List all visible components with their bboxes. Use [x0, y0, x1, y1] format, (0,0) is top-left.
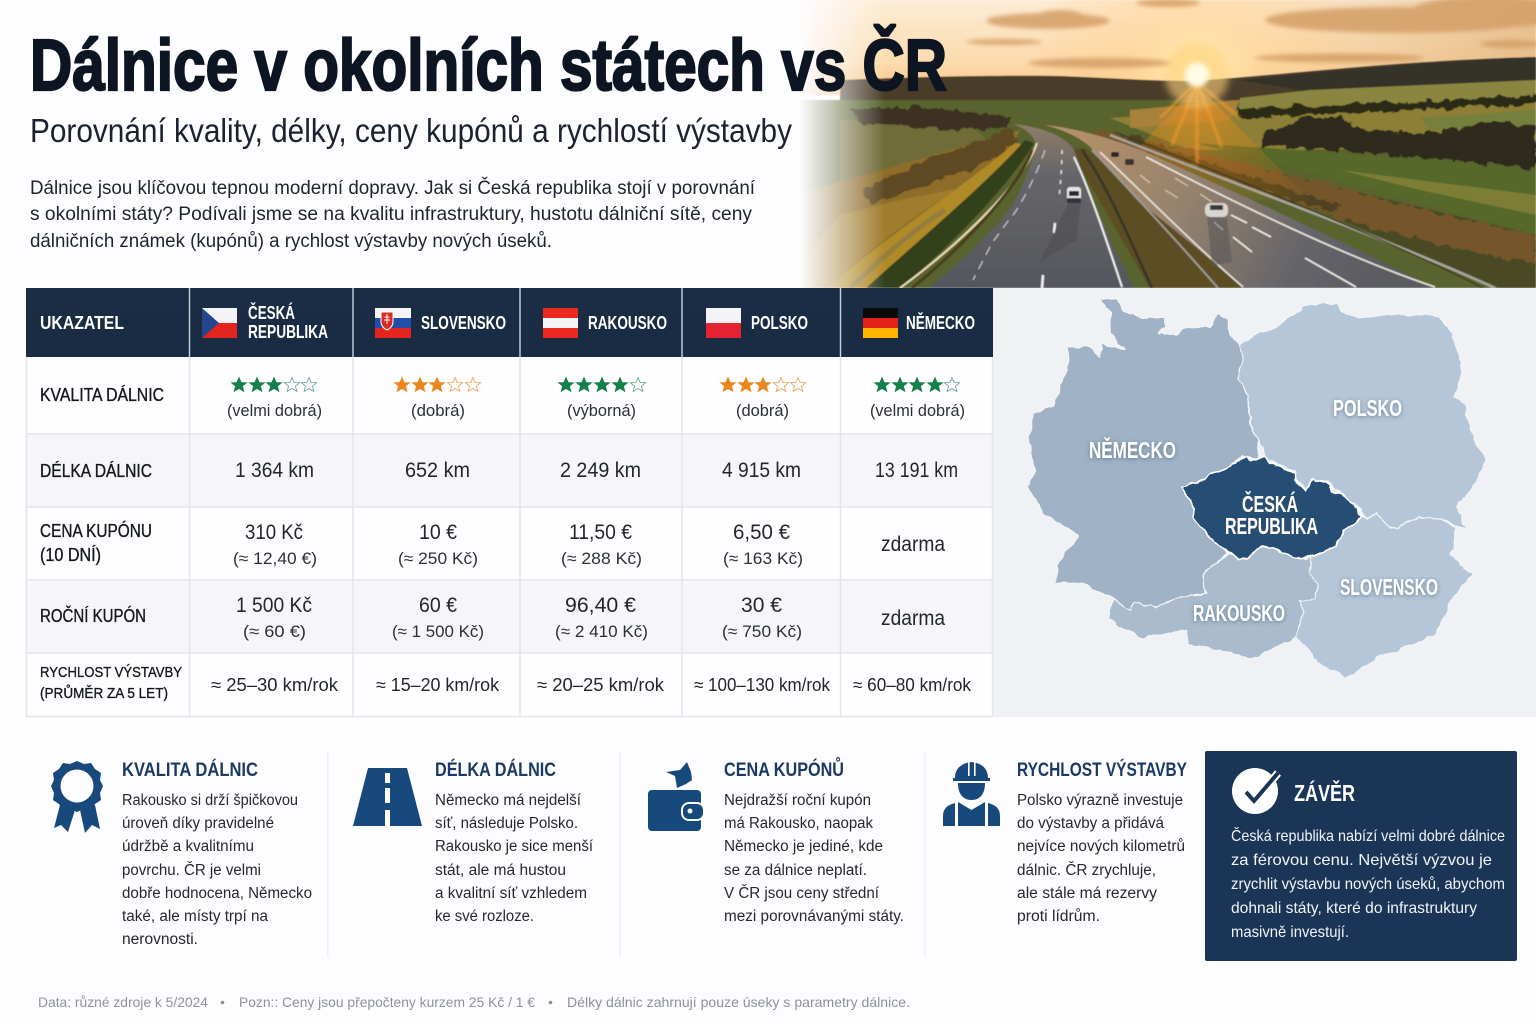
stars: Německo	[873, 376, 960, 392]
row: délka dálnic: 4 915 km	[722, 459, 801, 482]
map: Česká republika	[1183, 455, 1362, 560]
row: roční kupón: (≈ 750 Kč)	[722, 622, 802, 641]
footer note	[38, 994, 910, 1010]
panel: map	[993, 288, 1536, 717]
text block: dálnic. ČR zrychluje,	[1017, 862, 1156, 879]
footer note: Data: různé zdroje k 5/2024	[38, 994, 208, 1010]
table body background	[26, 357, 993, 717]
map: Slovensko	[1295, 513, 1473, 678]
cars	[1040, 152, 1232, 266]
row: cena kupónu: 6,50 €	[733, 521, 790, 544]
flag: Německo	[863, 308, 898, 338]
distant hills	[839, 56, 1532, 101]
title: Dálnice v okolních státech vs ČR	[30, 25, 947, 106]
row: kvalita dálnic: (velmi dobrá)	[870, 401, 965, 420]
text block: za férovou cenu. Největší výzvou je	[1231, 852, 1492, 869]
text block: V ČR jsou ceny střední	[724, 885, 880, 902]
intro paragraph	[30, 177, 756, 252]
text block: mezi porovnávanými státy.	[724, 908, 904, 925]
fields	[780, 100, 1536, 288]
text block: Nejdražší roční kupón	[724, 792, 871, 809]
text block	[724, 792, 904, 925]
subtitle: Porovnání kvality, délky, ceny kupónů a rychlostí výstavby	[30, 112, 792, 149]
map: Polsko	[1238, 303, 1487, 528]
hero photo: motorway at sunset	[780, 0, 1536, 288]
row: délka dálnic	[40, 459, 958, 482]
row: roční kupón: 1 500 Kč	[236, 594, 312, 617]
panel: kvalita dálnic: KVALITA DÁLNIC	[122, 759, 258, 781]
row: rychlost výstavby	[40, 664, 972, 702]
table header row: NĚMECKO	[906, 312, 975, 333]
map label: Česká republika: ČESKÁ	[1242, 490, 1298, 517]
row: cena kupónu: 10 €	[419, 521, 457, 544]
text block: zrychlit výstavbu nových úseků, abychom	[1231, 875, 1505, 893]
flag: Polsko	[706, 308, 741, 338]
row: kvalita dálnic: (dobrá)	[736, 401, 789, 420]
row: cena kupónu: zdarma	[881, 533, 945, 556]
text block: údržbě a kvalitnímu	[122, 838, 254, 855]
row: cena kupónu: CENA KUPÓNU	[40, 520, 152, 541]
panel: délka dálnic: DÉLKA DÁLNIC	[435, 759, 556, 781]
stars: Rakousko	[557, 376, 646, 392]
panel: závěr: ZÁVĚR	[1294, 779, 1355, 806]
text block	[1231, 826, 1505, 941]
text block: ale stále má rezervy	[1017, 885, 1157, 902]
icon: award rosette	[51, 761, 103, 833]
icon: construction worker	[943, 762, 1000, 826]
text block: Rakousko si drží špičkovou	[122, 792, 298, 809]
row: rychlost výstavby: (PRŮMĚR ZA 5 LET)	[40, 684, 168, 702]
text block: dobře hodnocena, Německo	[122, 885, 312, 902]
panel: cena kupónů	[648, 758, 904, 925]
row: délka dálnic: 2 249 km	[560, 459, 641, 482]
stars: Polsko	[719, 376, 806, 392]
flag: Česká republika	[202, 308, 237, 338]
sun rays	[1138, 88, 1301, 200]
row: rychlost výstavby: ≈ 100–130 km/rok	[694, 675, 831, 695]
map label: Německo: NĚMECKO	[1089, 436, 1176, 463]
text block: povrchu. ČR je velmi	[122, 862, 261, 879]
row: roční kupón: (≈ 1 500 Kč)	[392, 622, 484, 641]
text block	[1017, 792, 1185, 925]
table header row	[26, 288, 993, 357]
panel: kvalita dálnic	[51, 759, 312, 948]
row: kvalita dálnic	[40, 376, 965, 420]
table header row: POLSKO	[751, 313, 808, 333]
map label: Česká republika	[1225, 490, 1318, 539]
panel: závěr	[1205, 751, 1517, 961]
row: rychlost výstavby: ≈ 20–25 km/rok	[537, 675, 665, 695]
row: kvalita dálnic: (velmi dobrá)	[227, 401, 322, 420]
row: rychlost výstavby: RYCHLOST VÝSTAVBY	[40, 664, 182, 681]
footer note: Délky dálnic zahrnují pouze úseky s parametry dálnice.	[567, 994, 910, 1010]
row: roční kupón: 60 €	[419, 594, 457, 617]
text block: Německo je jediné, kde	[724, 838, 883, 855]
row: cena kupónu: (≈ 12,40 €)	[233, 549, 317, 568]
text block: Polsko výrazně investuje	[1017, 792, 1183, 809]
map label: Rakousko: RAKOUSKO	[1193, 600, 1285, 626]
text block: má Rakousko, naopak	[724, 815, 873, 832]
icon: road	[353, 768, 422, 826]
row: cena kupónu: (≈ 163 Kč)	[723, 549, 803, 568]
text block: Česká republika nabízí velmi dobré dálnice	[1231, 826, 1505, 845]
intro paragraph: dálničních známek (kupónů) a rychlost výstavby nových úseků.	[30, 231, 552, 252]
row: cena kupónu: 11,50 €	[569, 521, 632, 544]
stars: Česká republika	[230, 376, 317, 392]
map: Rakousko	[1108, 546, 1317, 658]
text block: nejvíce nových kilometrů	[1017, 838, 1185, 855]
text block: masivně investují.	[1231, 924, 1349, 941]
row: cena kupónu	[40, 520, 945, 568]
row: cena kupónu: 310 Kč	[245, 521, 303, 544]
row: kvalita dálnic: (dobrá)	[411, 401, 465, 420]
stars: Slovensko	[393, 376, 481, 392]
flag: Rakousko	[543, 308, 578, 338]
text block: nerovnosti.	[122, 931, 198, 948]
text block: dohnali státy, které do infrastruktury	[1231, 900, 1477, 917]
text block: síť, následuje Polsko.	[435, 815, 578, 832]
panel: délka dálnic	[353, 759, 594, 925]
tree lines	[850, 95, 1536, 264]
header: Česká republika	[248, 302, 328, 342]
row: délka dálnic: DÉLKA DÁLNIC	[40, 461, 152, 481]
table header row: SLOVENSKO	[421, 313, 506, 333]
row: rychlost výstavby: ≈ 15–20 km/rok	[376, 675, 500, 695]
text block: proti lídrům.	[1017, 908, 1100, 925]
header: Česká republika: REPUBLIKA	[248, 322, 328, 342]
intro paragraph: s okolními státy? Podívali jsme se na kvalitu infrastruktury, hustotu dálniční sítě, ceny	[30, 204, 753, 225]
row: kvalita dálnic: (výborná)	[567, 401, 636, 420]
text block: Německo má nejdelší	[435, 792, 582, 809]
text block	[435, 792, 594, 925]
table header row: RAKOUSKO	[588, 313, 667, 333]
map label: Česká republika: REPUBLIKA	[1225, 513, 1318, 539]
flag: Slovensko	[375, 308, 411, 338]
row: roční kupón	[40, 594, 945, 641]
text block: do výstavby a přidává	[1017, 815, 1164, 832]
barriers and road lines	[900, 132, 1495, 288]
row: cena kupónu: (10 DNÍ)	[40, 545, 101, 565]
text block: se za dálnice neplatí.	[724, 862, 867, 879]
panel: rychlost výstavby: RYCHLOST VÝSTAVBY	[1017, 759, 1187, 781]
panel: rychlost výstavby	[943, 759, 1187, 925]
row: cena kupónu: (≈ 288 Kč)	[561, 549, 642, 568]
intro paragraph: Dálnice jsou klíčovou tepnou moderní dopravy. Jak si Česká republika stojí v porovnání	[30, 177, 756, 199]
row: rychlost výstavby: ≈ 60–80 km/rok	[853, 675, 972, 695]
row: rychlost výstavby: ≈ 25–30 km/rok	[211, 675, 339, 695]
header: Česká republika: ČESKÁ	[248, 302, 295, 323]
row: roční kupón: zdarma	[881, 607, 945, 630]
text block	[122, 792, 312, 948]
map label: Polsko: POLSKO	[1333, 395, 1402, 421]
text block: stát, ale má hustou	[435, 862, 566, 879]
row: roční kupón: (≈ 60 €)	[243, 622, 306, 641]
row: roční kupón: ROČNÍ KUPÓN	[40, 605, 146, 626]
text block: Rakousko je sice menší	[435, 838, 594, 855]
roads	[1070, 148, 1243, 288]
text block: také, ale místy trpí na	[122, 908, 268, 925]
text block: a kvalitní síť vzhledem	[435, 885, 587, 902]
footer note: Pozn:: Ceny jsou přepočteny kurzem 25 Kč / 1 €	[239, 994, 535, 1010]
row: roční kupón: (≈ 2 410 Kč)	[555, 622, 648, 641]
panel: cena kupónů: CENA KUPÓNŮ	[724, 758, 844, 781]
row: roční kupón: 30 €	[741, 594, 782, 617]
table header row: UKAZATEL	[40, 313, 124, 333]
row: roční kupón: 96,40 €	[565, 594, 636, 617]
comparison table	[26, 288, 993, 717]
row: délka dálnic: 13 191 km	[875, 459, 958, 482]
text block: ke své rozloze.	[435, 908, 534, 925]
row: cena kupónu: (≈ 250 Kč)	[398, 549, 478, 568]
map label: Slovensko: SLOVENSKO	[1340, 574, 1438, 600]
row: kvalita dálnic: KVALITA DÁLNIC	[40, 385, 164, 405]
icon: check mark	[1232, 768, 1278, 814]
icon: wallet	[648, 762, 704, 831]
row: délka dálnic: 652 km	[405, 459, 470, 482]
text block: úroveň díky pravidelné	[122, 815, 274, 832]
row: délka dálnic: 1 364 km	[235, 459, 314, 482]
map: Německo	[1028, 298, 1258, 610]
